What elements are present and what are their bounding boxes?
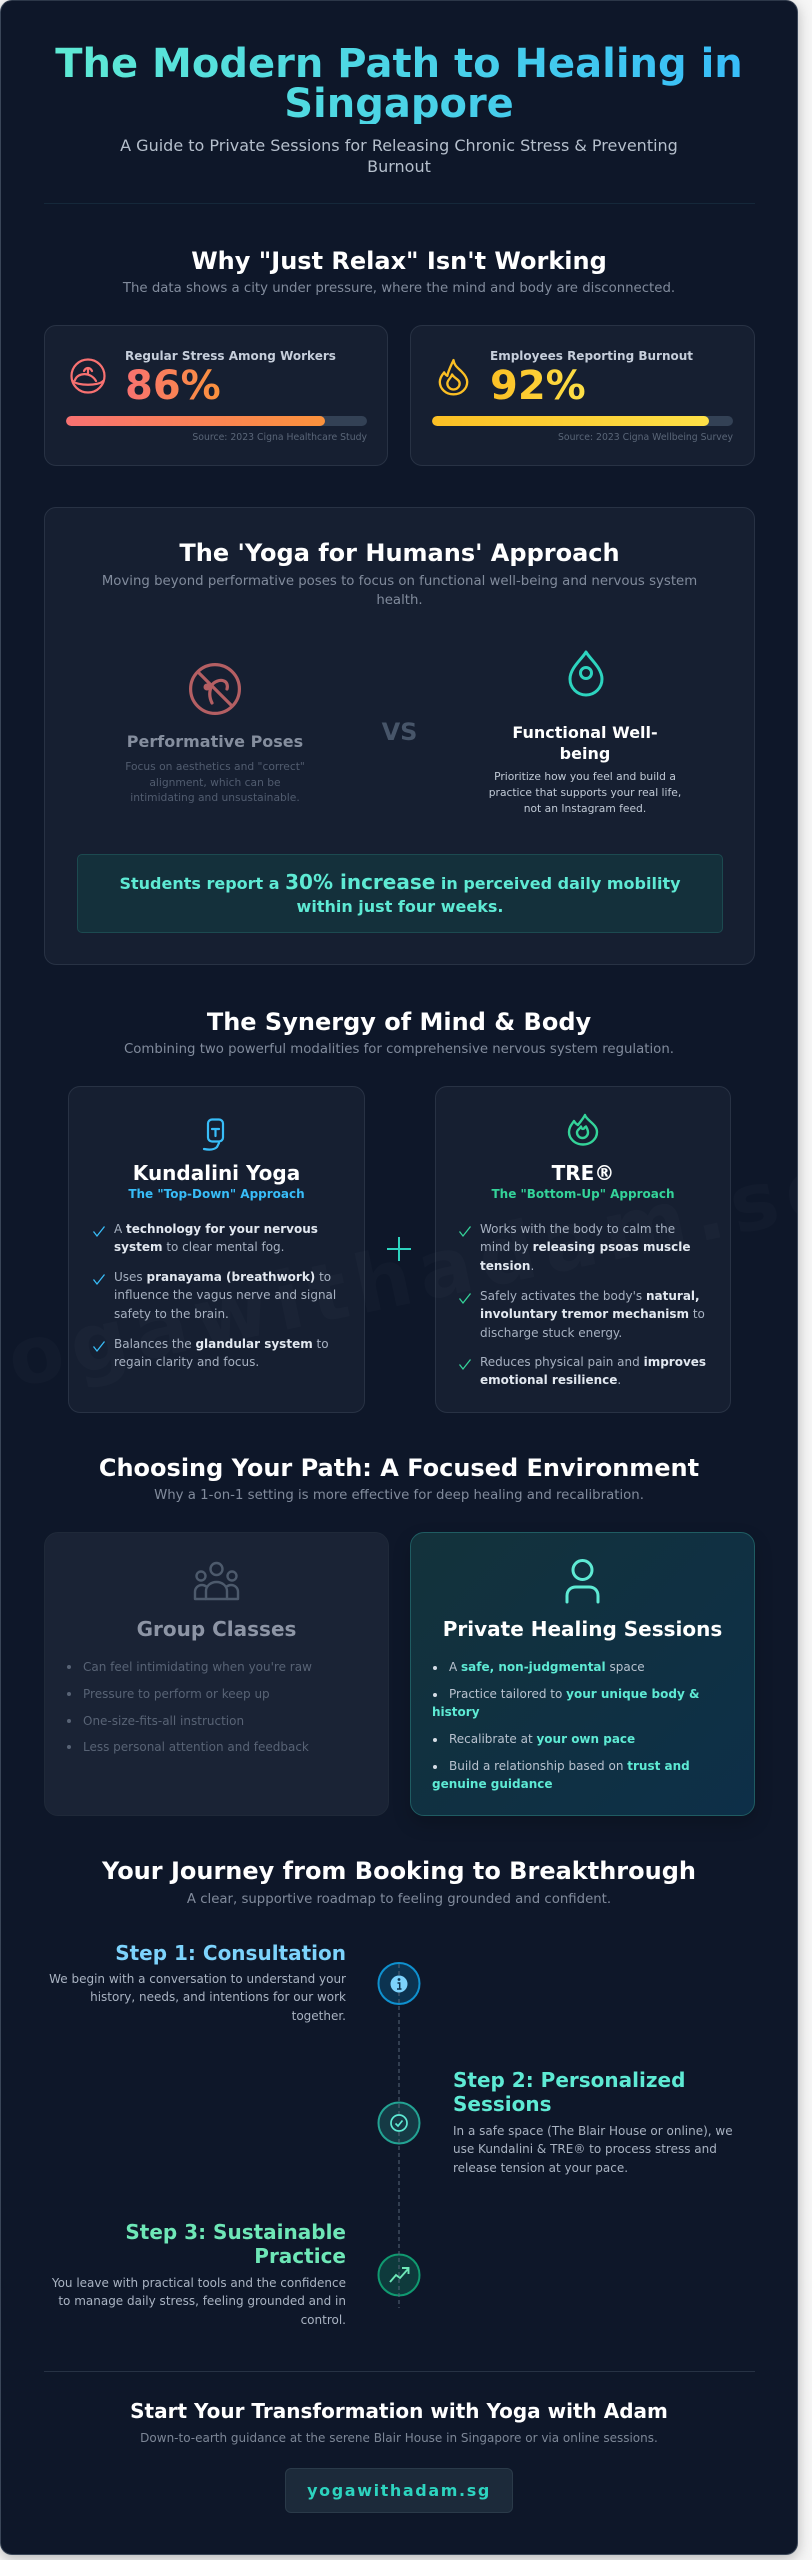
section subtitle: A clear, supportive roadmap to feeling grounded and confident. [187, 1892, 611, 1907]
list item: mind by releasing psoas muscle [480, 1240, 691, 1254]
check [459, 1293, 471, 1304]
list item [114, 1270, 336, 1321]
list: Less personal attention and feedback [83, 1740, 309, 1754]
connector line [398, 1964, 400, 2308]
heading: Choosing Your Path: A Focused Environment [99, 1454, 699, 1482]
source: Source: 2023 Cigna Healthcare Study [192, 432, 367, 443]
step 3 title [0, 2220, 346, 2268]
step 1 text: together. [292, 2009, 346, 2023]
progress bar [66, 416, 367, 426]
list: genuine guidance [432, 1777, 553, 1791]
step 3 text: You leave with practical tools and the confidence [52, 2276, 346, 2290]
list item: emotional resilience. [480, 1373, 621, 1387]
list [432, 1660, 699, 1791]
functional well-being text: Prioritize how you feel and build a [494, 770, 676, 783]
icon: trend up [390, 2268, 408, 2282]
card title: TRE® [552, 1161, 614, 1185]
label: Regular Stress Among Workers [125, 349, 336, 363]
list item: regain clarity and focus. [114, 1355, 259, 1369]
list: Practice tailored to your unique body & [449, 1687, 699, 1701]
subtitle: Burnout [367, 157, 431, 176]
step 1 text: We begin with a conversation to understand your [49, 1972, 346, 1986]
progress bar [432, 416, 733, 426]
list item [480, 1289, 705, 1340]
heading: Why "Just Relax" Isn't Working [191, 247, 607, 275]
icon: stress face [70, 358, 106, 394]
performative poses title: Performative Poses [127, 732, 303, 751]
list item: safety to the brain. [114, 1307, 229, 1321]
timeline [370, 1951, 430, 2321]
icon: flame [438, 358, 468, 396]
performative poses text: intimidating and unsustainable. [130, 791, 300, 804]
step 3 text: control. [301, 2313, 346, 2327]
step 3 title: Practice [254, 2244, 346, 2268]
list item: A technology for your nervous [114, 1222, 318, 1236]
step 3 text: to manage daily stress, feeling grounded and in [58, 2294, 346, 2308]
subtitle: A Guide to Private Sessions for Releasing Chronic Stress & Preventing [120, 136, 678, 155]
performative poses text: Focus on aesthetics and "correct" [125, 760, 305, 773]
functional well-being title: Functional Well- [512, 722, 658, 742]
button: website: yogawithadam.sg [307, 2481, 491, 2500]
section: journey [49, 1857, 733, 2327]
stat card: burnout [410, 325, 755, 466]
list item [480, 1355, 706, 1387]
icon: kundalini [202, 1118, 224, 1151]
step 1 text [49, 1972, 346, 2023]
footer subtitle: Down-to-earth guidance at the serene Blair House in Singapore or via online sessions. [140, 2431, 658, 2445]
check [459, 1226, 471, 1237]
value: 92%: 92% [490, 363, 586, 409]
callout text: Students report a 30% increase in perceived daily mobility [119, 870, 681, 894]
icon: check circle [391, 2115, 407, 2131]
icon: group [194, 1562, 240, 1600]
list item [480, 1222, 691, 1273]
step 2 text [453, 2124, 733, 2175]
title: The Modern Path to Healing in [55, 41, 743, 87]
card: kundalini yoga [68, 1086, 365, 1413]
step 3 title: Step 3: Sustainable [125, 2220, 346, 2244]
list: One-size-fits-all instruction [83, 1714, 244, 1728]
step 2 title: Step 2: Personalized [453, 2068, 685, 2092]
functional well-being title [512, 722, 658, 762]
performative poses text: alignment, which can be [149, 776, 281, 789]
card tagline: The "Top-Down" Approach [128, 1187, 305, 1201]
list item: Balances the glandular system to [114, 1337, 329, 1351]
step 2 title [453, 2068, 685, 2116]
list: history [432, 1705, 480, 1719]
card title: Kundalini Yoga [133, 1161, 300, 1185]
card title: Group Classes [137, 1617, 296, 1641]
callout text: within just four weeks. [297, 896, 503, 916]
step 2 text: use Kundalini & TRE® to process stress and [453, 2142, 717, 2156]
list: A safe, non-judgmental space [449, 1660, 645, 1674]
list item: Works with the body to calm the [480, 1222, 675, 1236]
list [67, 1660, 312, 1754]
section subtitle: The data shows a city under pressure, where the mind and body are disconnected. [123, 281, 675, 296]
section: choosing your path [44, 1454, 755, 1816]
step 2 text: In a safe space (The Blair House or online), we [453, 2124, 733, 2138]
step 3 text [0, 2274, 346, 2329]
check [93, 1341, 105, 1352]
source: Source: 2023 Cigna Wellbeing Survey [558, 432, 733, 443]
list item: discharge stuck energy. [480, 1326, 622, 1340]
list item: Safely activates the body's natural, [480, 1289, 700, 1303]
label: Employees Reporting Burnout [490, 349, 693, 363]
card title: Private Healing Sessions [443, 1617, 722, 1641]
section: footer call to action [0, 2361, 798, 2551]
step 2 text: release tension at your pace. [453, 2161, 628, 2175]
node 1 circle [378, 1963, 420, 2004]
list item [114, 1222, 318, 1254]
list item: involuntary tremor mechanism to [480, 1307, 705, 1321]
functional well-being title: being [560, 744, 610, 762]
section: why just relax [44, 247, 755, 466]
functional well-being text [489, 770, 681, 815]
callout text [119, 870, 681, 916]
step 2 title: Sessions [453, 2092, 552, 2116]
list item: tension. [480, 1259, 534, 1273]
panel: yoga for humans [44, 507, 755, 965]
list: Recalibrate at your own pace [449, 1732, 635, 1746]
node 3 circle [378, 2254, 420, 2296]
list item [114, 1337, 329, 1369]
functional well-being text: practice that supports your real life, [489, 786, 681, 799]
check [93, 1226, 105, 1237]
node 2 circle [378, 2102, 420, 2144]
list item: influence the vagus nerve and signal [114, 1288, 336, 1302]
subtitle [120, 136, 678, 176]
heading: The 'Yoga for Humans' Approach [179, 539, 620, 567]
header section [55, 41, 743, 176]
list: Build a relationship based on trust and [449, 1759, 690, 1773]
card: tre [435, 1086, 731, 1413]
vs label: VS [382, 718, 417, 746]
check [459, 1359, 471, 1370]
icon: flame [568, 1114, 598, 1146]
card: group classes [44, 1532, 389, 1816]
card tagline: The "Bottom-Up" Approach [491, 1187, 675, 1201]
panel subtitle: health. [376, 592, 423, 608]
heading: The Synergy of Mind & Body [207, 1008, 591, 1036]
title: Singapore [284, 81, 514, 127]
functional well-being text: not an Instagram feed. [524, 802, 646, 815]
panel subtitle: Moving beyond performative poses to focus on functional well-being and nervous system [102, 574, 697, 589]
stat card: stress [44, 325, 388, 466]
section subtitle: Why a 1-on-1 setting is more effective for deep healing and recalibration. [154, 1488, 644, 1503]
list: Pressure to perform or keep up [83, 1687, 270, 1701]
section subtitle: Combining two powerful modalities for comprehensive nervous system regulation. [124, 1042, 674, 1057]
step 1 text: history, needs, and intentions for our work [90, 1990, 346, 2004]
heading: Start Your Transformation with Yoga with Adam [130, 2399, 668, 2423]
value: 86%: 86% [125, 363, 221, 409]
heading: Your Journey from Booking to Breakthrough [102, 1857, 696, 1885]
icon: person [566, 1559, 600, 1604]
card: private sessions [410, 1532, 755, 1816]
icon: water drop [568, 650, 604, 696]
title [55, 41, 743, 127]
icon: crossed pose [189, 663, 241, 715]
check [93, 1274, 105, 1285]
list item: Reduces physical pain and improves [480, 1355, 706, 1369]
icon: plus [387, 1237, 411, 1261]
icon: info [390, 1976, 408, 1992]
section: synergy [68, 1008, 731, 1413]
list item: Uses pranayama (breathwork) to [114, 1270, 331, 1284]
step 1 title: Step 1: Consultation [115, 1941, 346, 1965]
button: website [285, 2468, 513, 2513]
callout: 30% increase [77, 854, 723, 933]
panel subtitle [102, 574, 697, 608]
performative poses text [125, 760, 305, 804]
list: Can feel intimidating when you're raw [83, 1660, 312, 1674]
list item: system to clear mental fog. [114, 1240, 284, 1254]
